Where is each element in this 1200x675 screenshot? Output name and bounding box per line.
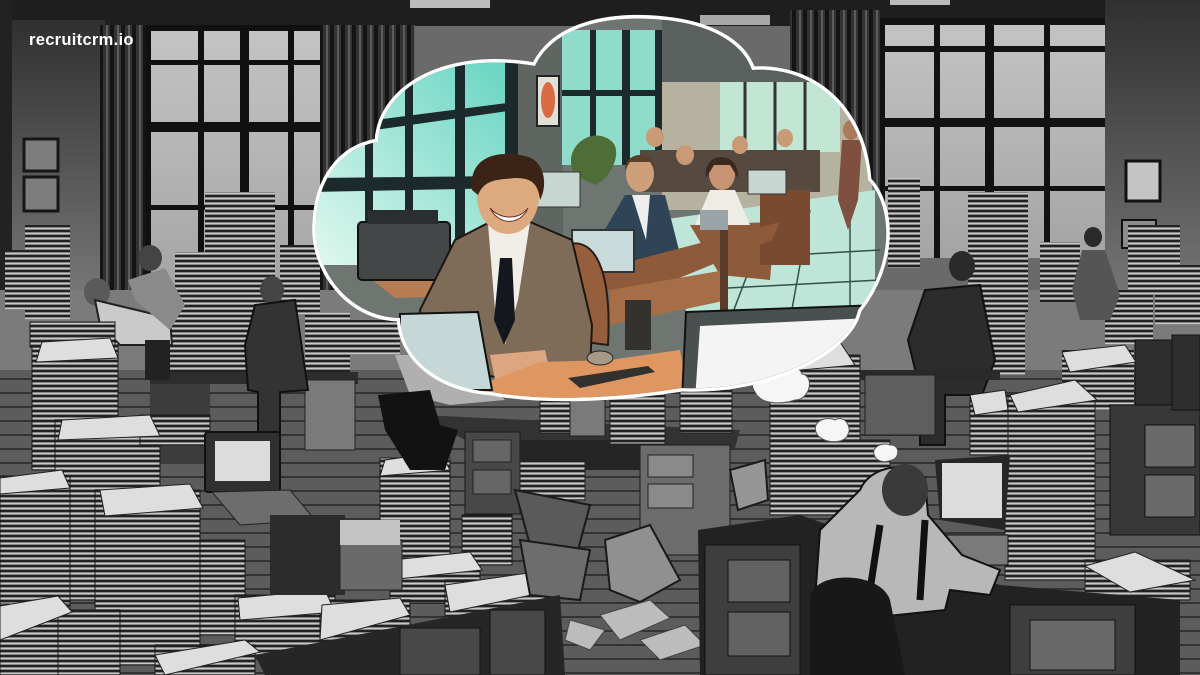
- logo text: recruitcrm.io: [29, 31, 134, 49]
- right window: [880, 18, 1105, 258]
- front desk: [480, 350, 690, 400]
- thought bubble trail: [752, 364, 898, 462]
- left window: [146, 25, 321, 295]
- scene laptops and back desks: [530, 170, 810, 280]
- stacks on middle desk: [520, 378, 732, 500]
- scene far room: [662, 20, 872, 210]
- scattered papers on floor: [565, 600, 705, 660]
- right desks and cabinets: [760, 370, 1200, 535]
- right tall stacks: [770, 355, 1190, 600]
- scene middle window: [562, 30, 662, 165]
- person: left bending worker: [84, 278, 172, 380]
- scene wall: [300, 10, 900, 410]
- plant: [571, 135, 616, 185]
- right wall: [1105, 0, 1200, 330]
- mid room haze: [0, 290, 1200, 380]
- middle cabinets: [270, 515, 402, 595]
- right columns: [790, 10, 880, 250]
- scene floor: [660, 190, 880, 325]
- folder organizer on the desk: [274, 400, 605, 595]
- wire baskets: [515, 460, 768, 602]
- cloud outline: [316, 18, 886, 398]
- seated woman: [695, 157, 750, 230]
- scene main desks: [370, 222, 780, 350]
- cloud scene contents: [300, 10, 900, 410]
- scene far workers: [640, 120, 862, 230]
- foreground worker: [810, 464, 1000, 675]
- left curtains: [100, 25, 146, 295]
- seated office worker behind desk: [378, 355, 505, 470]
- right back worker at filing stacks: [908, 251, 995, 445]
- bottom left desk front: [255, 595, 565, 675]
- large right laptop: [682, 304, 862, 388]
- scene pillar with art: [518, 36, 563, 235]
- back desk left: [150, 372, 358, 464]
- middle desk: [420, 415, 740, 555]
- paper tops right: [760, 342, 1195, 592]
- thought cloud with happy office scene: [300, 10, 900, 410]
- person: back worker pair: [128, 245, 185, 330]
- ceiling: [0, 0, 1200, 26]
- far right filing boxes: [1135, 335, 1200, 410]
- left wall: [0, 0, 105, 470]
- vintage computer left: [205, 432, 315, 525]
- large stacks left side: [0, 322, 545, 675]
- seated man in blue suit: [605, 155, 679, 260]
- scene left window: [310, 50, 520, 265]
- foreground man in suit: [420, 154, 592, 382]
- foreground desk right: [698, 515, 1180, 675]
- chair: [574, 242, 610, 346]
- floor: [0, 370, 1200, 675]
- foreground monitor: [930, 455, 1010, 565]
- paper tops left: [0, 338, 546, 675]
- far background standing person: [1072, 227, 1120, 320]
- small cup and tablet: [568, 351, 655, 388]
- back stacks of paper: [5, 178, 1200, 410]
- middle curtains and wall behind the cloud: [320, 25, 415, 325]
- person: left back worker: [245, 276, 308, 465]
- printer: [358, 210, 450, 280]
- front laptop: [400, 312, 492, 390]
